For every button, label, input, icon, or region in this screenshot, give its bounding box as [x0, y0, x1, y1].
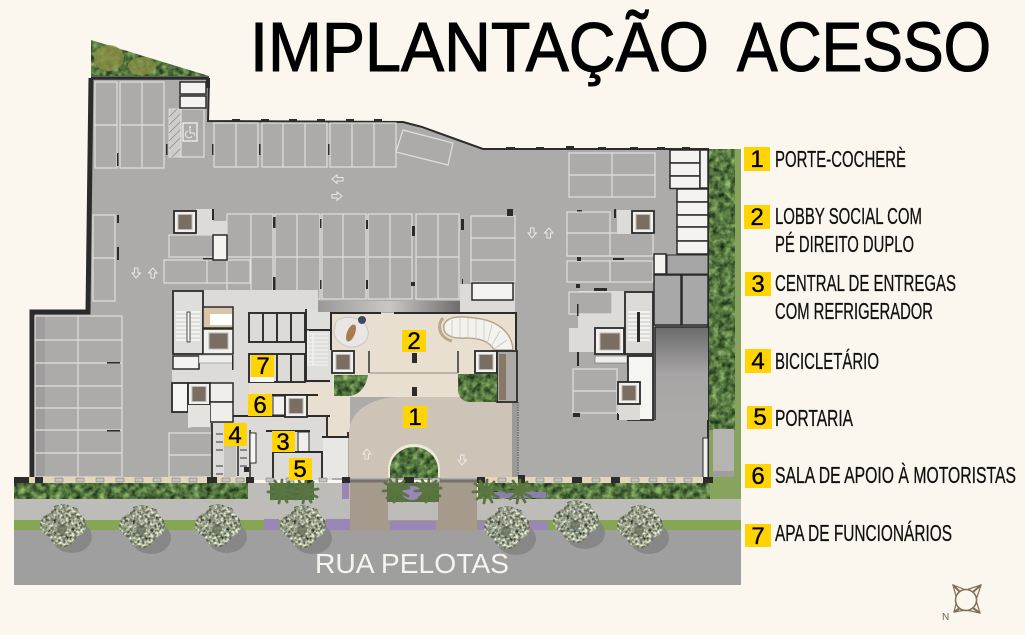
street name: RUA PELOTAS — [315, 548, 509, 579]
title: IMPLANTAÇÃO — [250, 8, 709, 86]
facade strip: right — [477, 475, 713, 483]
garden: top left — [91, 40, 209, 76]
plan marker 4 — [224, 422, 247, 449]
plan marker 7: 7 — [256, 353, 270, 380]
legend item 1: PORTE-COCHERÈ — [775, 146, 906, 172]
planter: left — [334, 375, 368, 396]
parking stalls: upper row — [95, 82, 453, 168]
legend item 2: 2 — [750, 204, 764, 231]
hedge: right — [478, 482, 710, 499]
legend item 3: COM REFRIGERADOR — [775, 298, 933, 324]
garden: right side — [709, 149, 741, 499]
hedge: left — [14, 483, 248, 499]
legend item 2: PÉ DIREITO DUPLO — [775, 231, 914, 257]
light side strip — [512, 402, 517, 478]
plan marker 5 — [289, 456, 312, 483]
palms — [268, 479, 532, 503]
outer walls — [32, 78, 708, 480]
legend item 7 — [745, 520, 952, 550]
porte-cochere paving — [349, 397, 512, 478]
legend item 7: 7 — [751, 523, 765, 550]
upper-left column with lift — [174, 209, 227, 260]
parking stalls: right — [567, 153, 655, 420]
road — [14, 530, 741, 585]
legend item 5 — [747, 404, 853, 431]
trees — [40, 500, 669, 555]
lobby floor — [305, 313, 516, 437]
grass strip: right — [477, 520, 741, 530]
icon: wheelchair — [185, 126, 195, 138]
legend item 3 — [745, 270, 956, 324]
garage gradient strip — [318, 301, 460, 312]
parking stalls: left block — [35, 316, 122, 477]
legend item 5: PORTARIA — [775, 405, 853, 431]
legend item 1 — [744, 146, 906, 173]
facade strip: left — [14, 477, 254, 483]
legend item 1: 1 — [750, 146, 764, 173]
storage boxes top left — [180, 82, 206, 108]
title: ACESSO — [737, 8, 991, 86]
legend item 6: 6 — [751, 463, 765, 490]
plan marker 2: 2 — [407, 328, 421, 355]
reception and deliveries — [266, 416, 348, 480]
service rooms — [233, 309, 330, 417]
parking floor — [32, 78, 708, 480]
site plan — [14, 40, 741, 585]
legend item 3: 3 — [751, 271, 765, 298]
parking stalls: central rows — [93, 209, 515, 301]
planter: round island — [388, 444, 440, 478]
sidewalk: left — [14, 483, 350, 520]
facade strip: centre — [266, 477, 477, 483]
left core floor — [172, 290, 332, 480]
light floor near lobby — [460, 283, 515, 313]
title — [250, 8, 991, 86]
legend item 2 — [744, 203, 922, 257]
median island — [387, 483, 439, 530]
parking stalls: lower left — [169, 433, 212, 477]
legend item 2: LOBBY SOCIAL COM — [775, 203, 922, 229]
right side storage and ramp — [654, 150, 708, 325]
sidewalk: right — [477, 499, 741, 520]
traffic arrows — [132, 175, 553, 465]
legend item 5: 5 — [753, 404, 767, 431]
plan marker 6: 6 — [253, 392, 267, 419]
plan marker 5: 5 — [293, 456, 307, 483]
planter: right — [458, 374, 497, 402]
plan marker 7 — [251, 353, 274, 380]
legend item 4: 4 — [751, 348, 765, 375]
icon: compass: N — [942, 612, 949, 623]
driveway — [350, 482, 477, 531]
grass strip: left — [14, 520, 350, 530]
bike storage — [212, 423, 256, 480]
plan marker 1 — [403, 404, 427, 431]
lobby furniture — [334, 316, 368, 347]
plan marker 1: 1 — [408, 404, 422, 431]
darker parking strip — [35, 316, 45, 477]
legend — [744, 146, 1016, 550]
right core — [569, 291, 708, 478]
legend item 4: BICICLETÁRIO — [775, 348, 879, 374]
entrance planting — [264, 483, 548, 530]
lobby walls and lifts — [331, 313, 518, 478]
left core stairs and rooms — [172, 291, 234, 427]
plan marker 3 — [272, 429, 295, 456]
plan marker 4: 4 — [228, 422, 242, 449]
plan marker 6 — [248, 392, 272, 419]
accessible parking stall — [169, 109, 204, 157]
plan marker 3: 3 — [276, 429, 290, 456]
icon: compass — [942, 585, 981, 623]
plan marker 2 — [402, 328, 426, 355]
ramp — [655, 327, 708, 420]
legend item 4 — [745, 348, 879, 375]
spiral staircase — [440, 317, 513, 350]
